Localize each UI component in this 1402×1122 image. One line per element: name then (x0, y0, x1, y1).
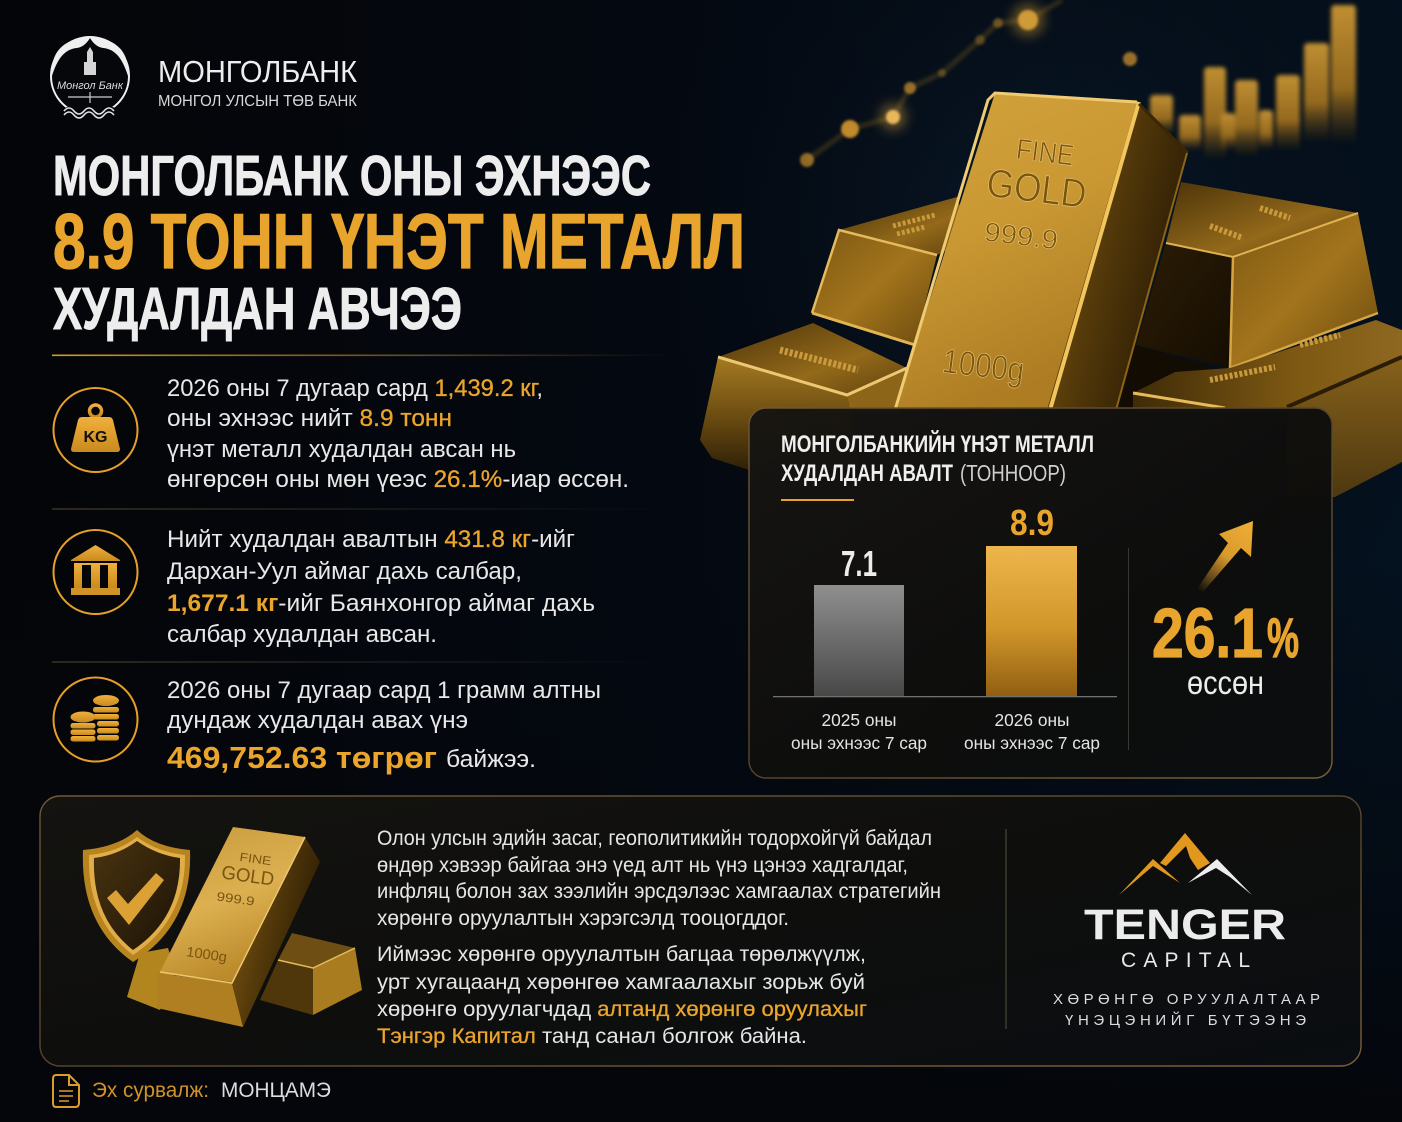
title: ХУДАЛДАН АВЧЭЭ (53, 276, 462, 342)
tilted gold bar: FINE (239, 850, 272, 868)
body text: Олон улсын эдийн засаг, геополитикийн тодорхойгүй байдал (377, 827, 932, 850)
title divider (52, 354, 672, 356)
body text (377, 827, 941, 1048)
stat item: gold price: дундаж худалдан авах үнэ (167, 707, 468, 734)
logo: Tenger Capital (1053, 833, 1320, 1029)
embossed bar text (940, 134, 1089, 390)
icon: kg weight: KG (84, 429, 108, 446)
bar chart: 2026 оны (994, 710, 1070, 730)
tilted gold bar: GOLD (220, 862, 275, 891)
bar chart: 7.1 (841, 543, 877, 584)
embossed bar text: 999.9 (983, 217, 1060, 255)
bar chart: 8.9 (1010, 502, 1054, 543)
stat item: branch purchases (54, 526, 595, 648)
icon: kg weight (54, 388, 138, 472)
stat item: monthly purchase: үнэт металл худалдан авсан нь (167, 436, 516, 463)
source line (53, 1075, 331, 1107)
icon: bank building (54, 530, 138, 614)
body text: Иймээс хөрөнгө оруулалтын багцаа төрөлжүүлж, (377, 943, 866, 966)
stat item: gold price: байжээ. (446, 746, 536, 773)
stat item: branch purchases: салбар худалдан авсан. (167, 621, 437, 648)
source line: Эх сурвалж: (92, 1079, 209, 1102)
logo: Tenger Capital: ҮНЭЦЭНИЙГ БҮТЭЭНЭ (1065, 1011, 1306, 1029)
hero image: rising gold chart (800, 0, 1356, 167)
stat item: gold price: 2026 оны 7 дугаар сард 1 грамм алтны (167, 677, 601, 704)
title (53, 144, 745, 342)
bar chart: 2025 оны (822, 710, 896, 730)
tilted gold bar: 1000g (185, 943, 228, 965)
logo: Tenger Capital: TENGER (1084, 901, 1286, 949)
stat item: gold price: 469,752.63 төгрөг (167, 740, 437, 775)
icon: document (53, 1075, 79, 1107)
embossed bar text: 1000g (940, 342, 1026, 390)
logo: Tenger Capital: ХӨРӨНГӨ ОРУУЛАЛТААР (1053, 991, 1320, 1008)
brand name: МОНГОЛ УЛСЫН ТӨВ БАНК (158, 93, 357, 110)
back right bar (1136, 182, 1378, 368)
divider (52, 662, 672, 663)
small gold bars (127, 933, 362, 1015)
stat item: monthly purchase: өнгөрсөн оны мөн үеэс 26.1%-иар өссөн. (167, 466, 629, 493)
body text: Тэнгэр Капитал танд санал болгож байна. (377, 1025, 807, 1048)
hero image: gold bars (700, 93, 1402, 497)
stat item: branch purchases: Дархан-Уул аймаг дахь салбар, (167, 558, 522, 585)
stat item: branch purchases: Нийт худалдан авалтын 431.8 кг-ийг (167, 526, 575, 553)
chart heading: (ТОННООР) (960, 460, 1066, 486)
growth figure: өссөн (1187, 664, 1264, 701)
logo: Tenger Capital: CAPITAL (1121, 949, 1250, 972)
chart heading: МОНГОЛБАНКИЙН ҮНЭТ МЕТАЛЛ (781, 430, 1094, 458)
body text: өндөр хэвээр байгаа энэ үед алт нь үнэ цэнээ хадгалдаг, (377, 854, 908, 877)
growth figure: 26.1 (1152, 594, 1263, 672)
embossed bar text: FINE (1014, 134, 1076, 172)
stat item: monthly purchase: оны эхнээс нийт 8.9 тонн (167, 405, 452, 432)
arrow up (1197, 521, 1253, 593)
logo: Mongolbank emblem (51, 37, 129, 118)
tilted gold bar (157, 827, 320, 1027)
stat item: monthly purchase: 2026 оны 7 дугаар сард 1,439.2 кг, (167, 375, 543, 402)
brand name: МОНГОЛБАНК (158, 54, 357, 89)
embossed bar text: GOLD (984, 161, 1089, 217)
lower right bar (1133, 320, 1402, 497)
stat item: gold price (54, 677, 601, 775)
chart heading: ХУДАЛДАН АВАЛТ (781, 460, 953, 487)
body text: хөрөнгө оруулалтын хэрэгсэлд тооцогддог. (377, 907, 789, 930)
source line: МОНЦАМЭ (221, 1079, 331, 1102)
title: 8.9 ТОНН ҮНЭТ МЕТАЛЛ (53, 197, 745, 285)
brand name (158, 54, 357, 110)
tilted gold bar: 999.9 (216, 889, 255, 909)
main bar (895, 93, 1188, 410)
growth figure: % (1267, 606, 1299, 669)
back left bar (812, 197, 970, 345)
bar chart: оны эхнээс 7 сар (964, 733, 1100, 753)
title: МОНГОЛБАНК ОНЫ ЭХНЭЭС (53, 144, 651, 208)
growth figure (1152, 594, 1299, 701)
panel: investment recommendation (40, 796, 1361, 1066)
icon: coin stacks (54, 678, 138, 762)
panel: bar chart card (749, 408, 1332, 778)
bar chart (773, 502, 1117, 753)
logo: Mongolbank emblem: Монгол Банк (57, 80, 124, 92)
body text: хөрөнгө оруулагчдад алтанд хөрөнгө оруулахыг (377, 998, 867, 1021)
stat item: monthly purchase (54, 375, 629, 493)
chart heading (781, 430, 1094, 501)
body text: инфляц болон зах зээлийн эрсдэлээс хамгаалах стратегийн (377, 880, 941, 903)
icon: shield with check (83, 830, 190, 962)
divider (52, 508, 672, 510)
body text: урт хугацаанд хөрөнгөө хамгаалахыг зорьж буй (377, 971, 865, 994)
lower left bar (700, 323, 907, 470)
bar chart: оны эхнээс 7 сар (791, 733, 927, 753)
illustration: shield and gold bars (83, 827, 362, 1027)
stat item: branch purchases: 1,677.1 кг-ийг Баянхонгор аймаг дахь (167, 590, 595, 617)
shadow between bars (1040, 345, 1230, 412)
